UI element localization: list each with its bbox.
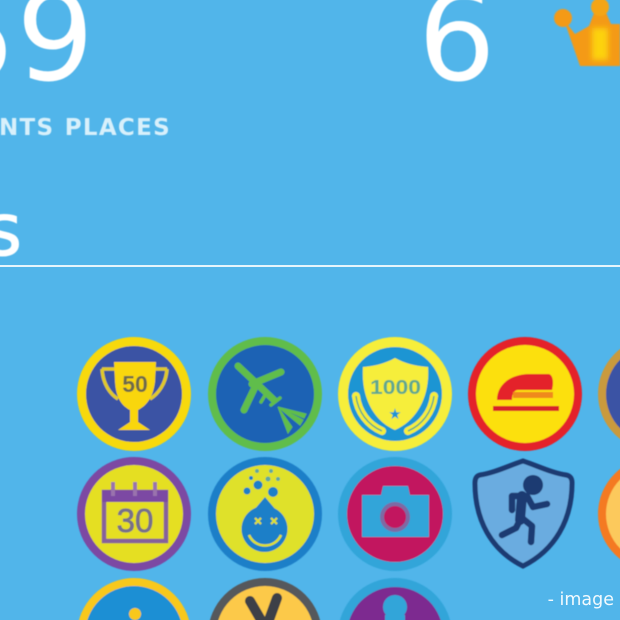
divider	[0, 265, 620, 267]
badge: calendar 30	[77, 457, 191, 571]
badge: camera	[338, 457, 452, 571]
badge: partial blue with yellow ring	[77, 578, 191, 620]
badge: partial blue with gold ring	[598, 337, 620, 451]
badge: smiling bubble	[208, 457, 322, 571]
badge: calendar 30: 30	[117, 502, 153, 539]
badge: shield 1000: 1000	[370, 377, 421, 399]
badge: trophy 50	[77, 337, 191, 451]
badge: shield 1000	[338, 337, 452, 451]
badge: partial orange	[598, 457, 620, 571]
caption: - image	[548, 590, 614, 610]
badge: partial yellow with dark ring	[208, 578, 322, 620]
badge: partial purple	[338, 578, 452, 620]
badge: trophy 50: 50	[122, 371, 148, 397]
badge: airplane	[208, 337, 322, 451]
badge: shield 1000: ★	[388, 405, 402, 423]
icon: crown	[554, 0, 620, 66]
badge: stapler	[468, 337, 582, 451]
badge: running shield	[475, 461, 572, 566]
